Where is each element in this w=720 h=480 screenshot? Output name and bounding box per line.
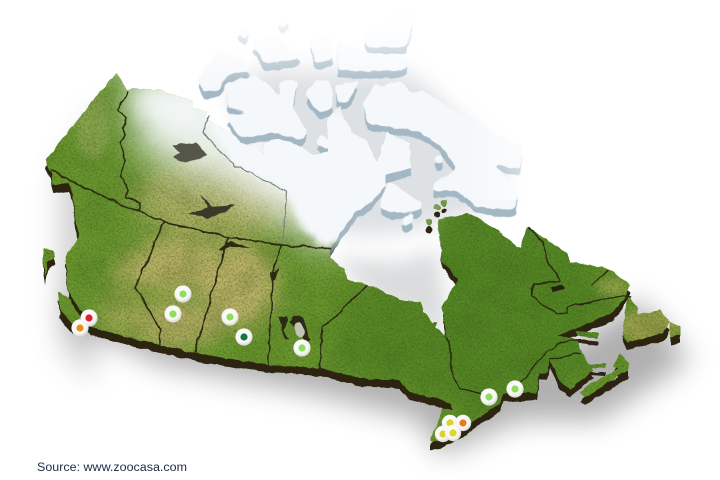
lake winnipeg interior	[294, 321, 306, 339]
ontario borders	[320, 285, 482, 395]
lake mistassini	[550, 284, 565, 292]
marker: vancouver area	[71, 309, 98, 337]
land group with organic coastline	[42, 24, 680, 450]
nunavut border	[203, 117, 287, 244]
reindeer lake	[271, 268, 279, 281]
white fade right of northern islands	[470, 90, 550, 200]
lake athabasca	[218, 241, 250, 251]
city markers	[71, 285, 524, 442]
marker: winnipeg	[293, 339, 311, 357]
lake manitoba	[279, 316, 288, 340]
yukon border	[117, 92, 139, 212]
ground shadow under the land	[70, 250, 690, 455]
eastern darker grass	[370, 205, 610, 415]
northern snow fade	[130, 60, 430, 250]
north nwt pale coast	[133, 86, 210, 125]
provincial and territorial borders	[52, 92, 630, 395]
arctic islands	[198, 7, 522, 227]
land surface: grass, prairie tan and northern snow	[42, 73, 680, 442]
manitoba west border	[268, 245, 282, 365]
lakes	[171, 143, 565, 342]
yukon and atlantic tones	[76, 89, 680, 343]
mid-north olive	[135, 158, 295, 242]
alberta and saskatchewan borders	[135, 221, 228, 352]
60th parallel border	[52, 170, 331, 248]
source credit: Source: www.zoocasa.com	[37, 462, 187, 474]
lake winnipeg	[290, 316, 311, 342]
great slave lake	[188, 195, 235, 219]
st lawrence	[510, 340, 580, 386]
prairie tan area	[97, 237, 278, 347]
sea shadow behind the arctic islands	[60, 65, 505, 380]
marker: toronto area cluster	[435, 415, 471, 442]
moss texture	[52, 98, 672, 416]
marker: edmonton and calgary	[164, 285, 192, 323]
marker: saskatoon and regina	[221, 308, 253, 346]
great bear lake	[171, 143, 207, 163]
nunavut snow	[205, 110, 420, 248]
white fade at top of map	[0, 0, 720, 90]
labrador border	[530, 228, 630, 313]
marker: ottawa and montreal	[480, 380, 524, 406]
